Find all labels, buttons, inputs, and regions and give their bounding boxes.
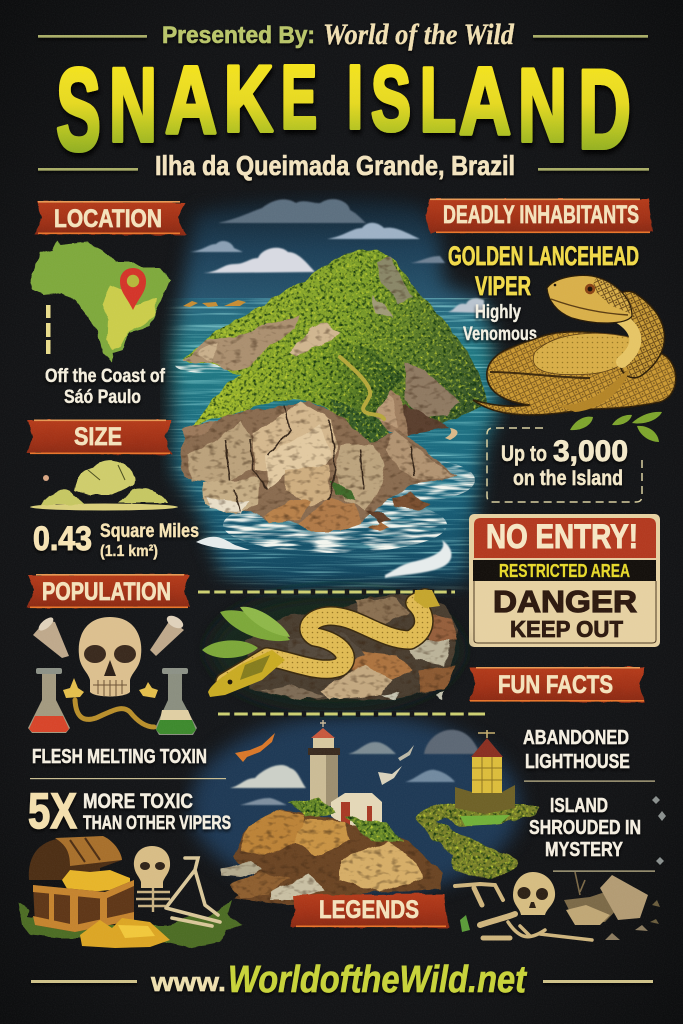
- sign: no entry: NO ENTRY!: [486, 518, 638, 556]
- sign: no entry: KEEP OUT: [510, 616, 623, 642]
- banner: size: SIZE: [74, 423, 122, 451]
- banner: fun facts: [469, 667, 645, 702]
- icon: leaves: [570, 412, 662, 442]
- icon: green flask: [155, 668, 197, 735]
- illustration: skeleton and rubble: [455, 872, 660, 940]
- icon: fangs: [33, 613, 185, 658]
- subtitle: Ilha da Queimada Grande, Brazil: [155, 150, 515, 181]
- rocky headland: [222, 797, 443, 905]
- map of Brazil with pin: [30, 240, 170, 362]
- icon: skeleton: [134, 846, 220, 926]
- banner: size: [27, 420, 172, 455]
- icon: venom stars: [63, 678, 84, 698]
- illustration: snake on rocks: [198, 589, 460, 708]
- illustration: golden lancehead viper: [473, 275, 676, 415]
- icon: gold nuggets: [80, 918, 170, 948]
- title: SNAKE ISLAND: N: [109, 47, 157, 164]
- banner: legends: [290, 894, 448, 928]
- text: island shrouded in mystery: [529, 795, 641, 861]
- stat: size 0.43 square miles: [33, 520, 199, 560]
- small snake on island: [340, 357, 384, 419]
- title: SNAKE ISLAND: N: [518, 48, 567, 164]
- icon: sparkles: [652, 796, 666, 865]
- clouds: [190, 199, 484, 313]
- rocks: [245, 592, 458, 700]
- banner: location: LOCATION: [54, 205, 162, 233]
- snake body: [225, 598, 425, 682]
- title: SNAKE ISLAND: A: [459, 48, 511, 155]
- title: SNAKE ISLAND: K: [224, 46, 273, 151]
- sign: no entry: RESTRICTED AREA: [499, 561, 630, 581]
- icon: island silhouette: [30, 460, 178, 510]
- callout: up to 3,000: 3,000: [553, 435, 628, 468]
- header: presented by: Presented By:: [162, 22, 315, 49]
- icon: treasure chest and skeleton: [18, 836, 242, 948]
- banner: deadly inhabitants: [426, 198, 653, 233]
- callout: up to 3,000: Up to: [501, 441, 547, 466]
- text: golden lancehead viper: [448, 241, 639, 345]
- icon: toxin skull with fangs and flasks: [28, 613, 197, 735]
- text: abandoned lighthouse: LIGHTHOUSE: [525, 751, 630, 773]
- icon: small snake: [75, 700, 154, 727]
- panel: legends night sky backdrop: [182, 710, 528, 896]
- text: island shrouded in mystery: SHROUDED IN: [529, 817, 641, 839]
- footer: website: [31, 959, 653, 1001]
- banner: fun facts: FUN FACTS: [498, 671, 613, 699]
- text: off the coast of Sao Paulo: Off the Coast of: [45, 366, 166, 387]
- text: golden lancehead viper: Venomous: [463, 324, 537, 345]
- sign: no entry: [469, 514, 660, 647]
- icon: red flask: [28, 668, 70, 733]
- stat: 5X more toxic: 5X: [28, 783, 77, 839]
- title: SNAKE ISLAND: A: [165, 47, 217, 154]
- birds over the sea: [183, 300, 246, 307]
- stat: 5X more toxic: MORE TOXIC: [83, 790, 193, 813]
- text: abandoned lighthouse: ABANDONED: [523, 727, 629, 749]
- icon: birds: [235, 733, 414, 785]
- title: SNAKE ISLAND: [56, 44, 631, 175]
- banner: legends: LEGENDS: [319, 896, 419, 924]
- callout: up to 3,000: [487, 428, 642, 502]
- stat: size 0.43 square miles: 0.43: [33, 520, 92, 558]
- foam around the island: [175, 357, 475, 578]
- title: SNAKE ISLAND: D: [578, 47, 631, 172]
- text: golden lancehead viper: Highly: [475, 302, 521, 323]
- title: SNAKE ISLAND: I: [347, 48, 363, 148]
- island back mountain: [183, 250, 488, 425]
- stat: 5X more toxic: THAN OTHER VIPERS: [83, 813, 231, 834]
- title: SNAKE ISLAND: S: [371, 48, 411, 150]
- header: presented by: World of the Wild: [323, 18, 515, 51]
- text: flesh melting toxin: FLESH MELTING TOXIN: [32, 746, 207, 768]
- banner: location: [34, 201, 186, 235]
- illustration: Snake Island in the ocean: [160, 190, 510, 598]
- tower and wall: [417, 730, 540, 878]
- header: presented by: [38, 18, 648, 51]
- stat: size 0.43 square miles: (1.1 km²): [100, 543, 158, 560]
- island front green mound: [193, 340, 403, 450]
- stat: size 0.43 square miles: Square Miles: [100, 521, 199, 542]
- icon: chest: [29, 836, 134, 932]
- text: island shrouded in mystery: ISLAND: [550, 795, 608, 817]
- clouds: [230, 730, 480, 805]
- sign: no entry: DANGER: [493, 584, 637, 619]
- stat: 5X more toxic: [28, 783, 231, 839]
- text: island shrouded in mystery: MYSTERY: [545, 839, 624, 861]
- lighthouse: [308, 720, 382, 826]
- title: SNAKE ISLAND: S: [56, 44, 101, 175]
- illustration: legends lighthouse scene: [222, 720, 540, 905]
- footer: website: WorldoftheWild.net: [228, 959, 527, 1001]
- text: off the coast of Sao Paulo: [45, 366, 166, 408]
- icon: map pin: [120, 268, 146, 310]
- title: SNAKE ISLAND: E: [281, 48, 317, 148]
- leaves: [202, 607, 290, 658]
- footer: website: www.: [150, 967, 226, 997]
- banner: population: [27, 574, 190, 608]
- text: off the coast of Sao Paulo: Sáó Paulo: [64, 387, 141, 408]
- callout: up to 3,000: on the Island: [513, 467, 623, 490]
- text: abandoned lighthouse: [523, 727, 630, 773]
- text: golden lancehead viper: VIPER: [475, 271, 531, 301]
- island right cliffs: [340, 362, 460, 437]
- title: SNAKE ISLAND: L: [420, 50, 456, 151]
- banner: population: POPULATION: [42, 578, 171, 606]
- island front rocks: [180, 402, 457, 531]
- icon: skull: [79, 617, 141, 696]
